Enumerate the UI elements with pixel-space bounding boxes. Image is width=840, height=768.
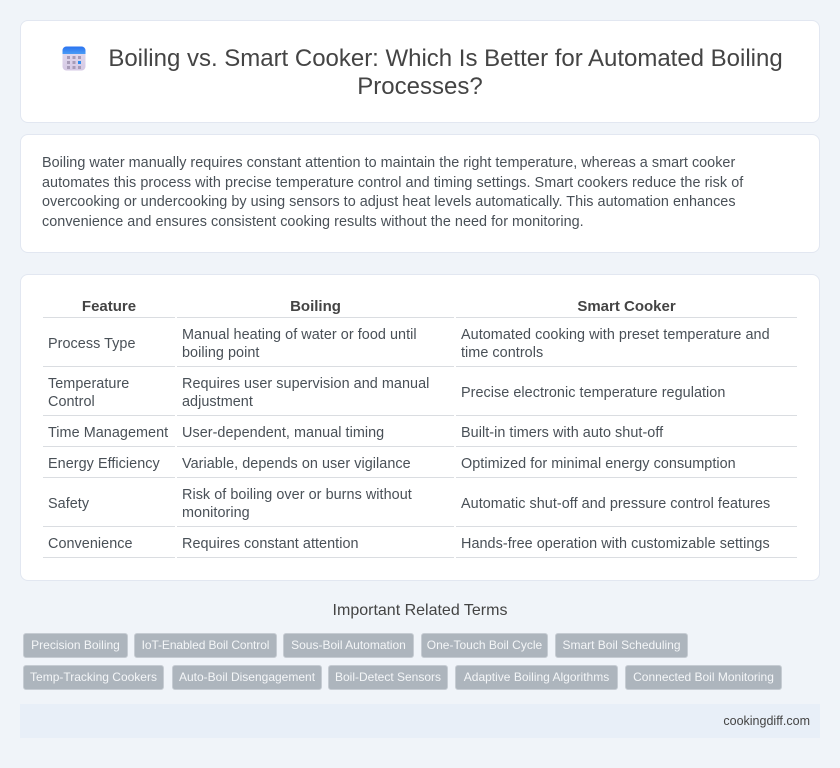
row: time management: Time Management bbox=[48, 425, 168, 441]
row: process type: Manual heating of water or food until bbox=[182, 327, 417, 343]
row: temperature control bbox=[43, 376, 797, 416]
heading: important related terms: Important Related Terms bbox=[333, 602, 507, 619]
title bbox=[108, 45, 783, 100]
table header: Smart Cooker bbox=[577, 298, 676, 315]
row: time management: User-dependent, manual timing bbox=[182, 425, 384, 441]
row: process type: Process Type bbox=[48, 336, 136, 352]
panel: comparison table bbox=[20, 274, 820, 581]
text block: intro paragraph: Boiling water manually requires constant attention to maintain the right temperature, whereas a smart cooker bbox=[42, 155, 735, 171]
row: temperature control: adjustment bbox=[182, 394, 253, 410]
row: time management bbox=[43, 425, 797, 447]
footer source: cookingdiff.com bbox=[723, 714, 810, 728]
text block: intro paragraph: overcooking or undercooking by using sensors to adjust heat levels automatically. This automation enhances bbox=[42, 194, 736, 210]
title: Boiling vs. Smart Cooker: Which Is Better for Automated Boiling bbox=[108, 45, 783, 72]
related terms tags: Adaptive Boiling Algorithms bbox=[464, 670, 609, 684]
row: convenience: Hands-free operation with customizable settings bbox=[461, 536, 770, 552]
row: convenience: Requires constant attention bbox=[182, 536, 359, 552]
row: temperature control: Control bbox=[48, 394, 95, 410]
row: time management: Built-in timers with auto shut-off bbox=[461, 425, 663, 441]
row: temperature control: Precise electronic temperature regulation bbox=[461, 385, 725, 401]
row: convenience: Convenience bbox=[48, 536, 133, 552]
footer bbox=[20, 704, 820, 738]
row: process type: Automated cooking with preset temperature and bbox=[461, 327, 770, 343]
title: Processes? bbox=[357, 73, 483, 100]
row: energy efficiency bbox=[43, 456, 797, 478]
row: process type: time controls bbox=[461, 345, 543, 361]
table header bbox=[43, 298, 797, 318]
icon: calendar bbox=[62, 46, 86, 70]
row: temperature control: Requires user supervision and manual bbox=[182, 376, 429, 392]
row: safety: Risk of boiling over or burns without bbox=[182, 487, 412, 503]
related terms tags bbox=[23, 633, 782, 690]
related terms tags: One-Touch Boil Cycle bbox=[427, 638, 542, 652]
row: process type: boiling point bbox=[182, 345, 259, 361]
panel: header card bbox=[20, 20, 820, 123]
text block: intro paragraph: convenience and ensures consistent cooking results without the need for monitoring. bbox=[42, 214, 584, 230]
table header: Feature bbox=[82, 298, 136, 315]
row: energy efficiency: Energy Efficiency bbox=[48, 456, 160, 472]
text block: intro paragraph bbox=[42, 155, 744, 230]
row: energy efficiency: Optimized for minimal energy consumption bbox=[461, 456, 736, 472]
row: temperature control: Temperature bbox=[48, 376, 129, 392]
related terms tags: Boil-Detect Sensors bbox=[335, 670, 441, 684]
row: safety: Automatic shut-off and pressure control features bbox=[461, 496, 770, 512]
comparison table bbox=[43, 298, 797, 558]
related terms tags: Sous-Boil Automation bbox=[291, 638, 406, 652]
table header: Boiling bbox=[290, 298, 341, 315]
related terms tags: Auto-Boil Disengagement bbox=[179, 670, 315, 684]
row: safety: Safety bbox=[48, 496, 89, 512]
row: safety: monitoring bbox=[182, 505, 250, 521]
related terms tags: Smart Boil Scheduling bbox=[562, 638, 681, 652]
related terms tags: Precision Boiling bbox=[31, 638, 120, 652]
row: process type bbox=[43, 327, 797, 367]
row: safety bbox=[43, 487, 797, 527]
row: energy efficiency: Variable, depends on user vigilance bbox=[182, 456, 411, 472]
related terms tags: Connected Boil Monitoring bbox=[633, 670, 774, 684]
text block: intro paragraph: automates this process with precise temperature control and timing settings. Smart cookers reduce the risk of bbox=[42, 175, 743, 191]
related terms tags: Temp-Tracking Cookers bbox=[30, 670, 157, 684]
related terms tags: IoT-Enabled Boil Control bbox=[142, 638, 269, 652]
panel: intro text bbox=[20, 134, 820, 253]
row: convenience bbox=[43, 536, 797, 558]
